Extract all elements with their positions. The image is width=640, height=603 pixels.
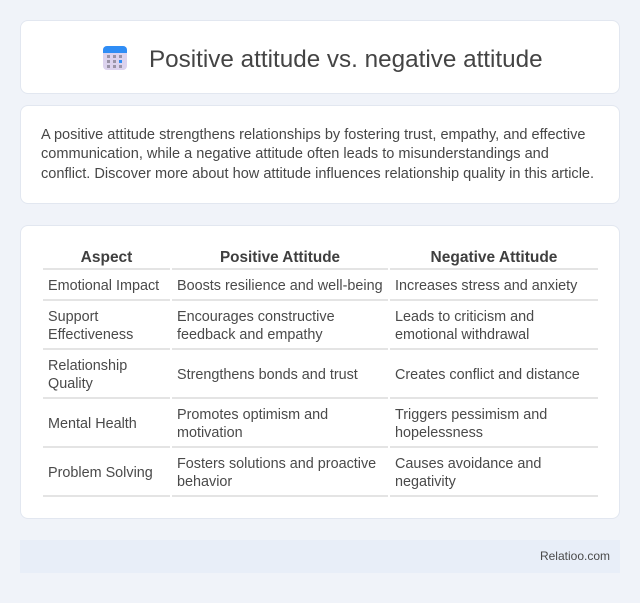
intro text: A positive attitude strengthens relationships by fostering trust, empathy, and effective — [41, 127, 585, 143]
row: support effectiveness: emotional withdrawal — [395, 327, 529, 343]
row: relationship quality — [48, 358, 580, 392]
row: problem solving — [48, 456, 541, 490]
row: support effectiveness — [48, 309, 534, 343]
row: mental health — [48, 407, 547, 441]
row: support effectiveness: Leads to criticism and — [395, 309, 534, 325]
row: mental health: Promotes optimism and — [177, 407, 328, 423]
intro panel — [20, 105, 620, 204]
row: emotional impact: Increases stress and anxiety — [395, 278, 577, 294]
row: emotional impact — [48, 278, 578, 294]
column headers: Aspect — [81, 249, 132, 266]
row: relationship quality: Relationship — [48, 358, 127, 374]
row: mental health: Triggers pessimism and — [395, 407, 547, 423]
row: support effectiveness: Encourages constructive — [177, 309, 335, 325]
row: support effectiveness: Support — [48, 309, 98, 325]
row: problem solving: Fosters solutions and proactive — [177, 456, 376, 472]
column headers: Negative Attitude — [431, 249, 557, 266]
row: relationship quality: Quality — [48, 376, 93, 392]
intro text — [41, 127, 594, 182]
title: Positive attitude vs. negative attitude — [149, 46, 543, 73]
table panel — [20, 225, 620, 519]
row: problem solving: behavior — [177, 474, 232, 490]
row: emotional impact: Emotional Impact — [48, 278, 159, 294]
column headers: Positive Attitude — [220, 249, 340, 266]
footer text: Relatioo.com — [540, 549, 610, 563]
row: relationship quality: Creates conflict and distance — [395, 367, 580, 383]
row: mental health: Mental Health — [48, 416, 137, 432]
row: support effectiveness: Effectiveness — [48, 327, 133, 343]
row: mental health: hopelessness — [395, 425, 483, 441]
icon: calendar — [103, 46, 127, 70]
row: support effectiveness: feedback and empathy — [177, 327, 323, 343]
footer bar — [20, 540, 620, 573]
title panel — [20, 20, 620, 94]
column headers — [81, 249, 557, 266]
intro text: conflict. Discover more about how attitude influences relationship quality in this article. — [41, 166, 594, 182]
row: problem solving: negativity — [395, 474, 456, 490]
row: problem solving: Causes avoidance and — [395, 456, 541, 472]
row: mental health: motivation — [177, 425, 243, 441]
row: emotional impact: Boosts resilience and well-being — [177, 278, 383, 294]
row: problem solving: Problem Solving — [48, 465, 153, 481]
intro text: communication, while a negative attitude often leads to misunderstandings and — [41, 146, 549, 162]
row: relationship quality: Strengthens bonds and trust — [177, 367, 358, 383]
